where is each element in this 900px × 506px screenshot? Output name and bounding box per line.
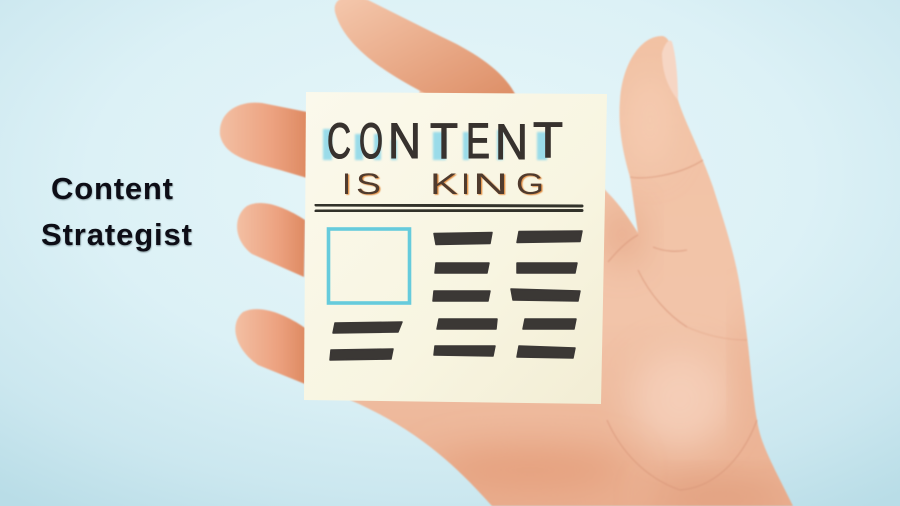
- middle finger: [220, 103, 307, 178]
- lettering: T: [533, 112, 563, 168]
- hand: [220, 0, 793, 506]
- little finger: [235, 309, 305, 384]
- subheading: is king: K: [430, 168, 458, 201]
- subheading: is king: I: [342, 168, 351, 201]
- subheading: is king: [342, 168, 544, 201]
- lettering: [327, 112, 563, 170]
- lettering: E: [466, 113, 490, 169]
- ring finger: [237, 203, 305, 277]
- heading: content: [323, 112, 563, 170]
- lettering: C: [327, 113, 351, 169]
- palm, thumb and wrist: [350, 36, 793, 506]
- caption: Content: [51, 171, 173, 206]
- lettering: N: [388, 113, 421, 169]
- double rule: [316, 205, 582, 211]
- subheading: is king: G: [516, 168, 544, 201]
- lettering: O: [359, 113, 383, 169]
- lettering: T: [430, 113, 458, 169]
- note paper: [304, 92, 607, 404]
- thumbnail: [662, 40, 678, 100]
- lettering: N: [495, 114, 528, 170]
- subheading: is king: N: [473, 168, 508, 201]
- sticky note: [304, 92, 607, 404]
- text lines: [330, 231, 582, 360]
- caption: [41, 171, 192, 252]
- subheading: is king: S: [356, 168, 381, 201]
- subheading: is king: I: [461, 168, 470, 201]
- thumb creases: [607, 160, 757, 490]
- caption: Strategist: [41, 217, 192, 252]
- palm shading: [430, 70, 790, 506]
- image placeholder box: [328, 229, 410, 303]
- index finger: [335, 0, 516, 96]
- blue highlights: [323, 129, 547, 160]
